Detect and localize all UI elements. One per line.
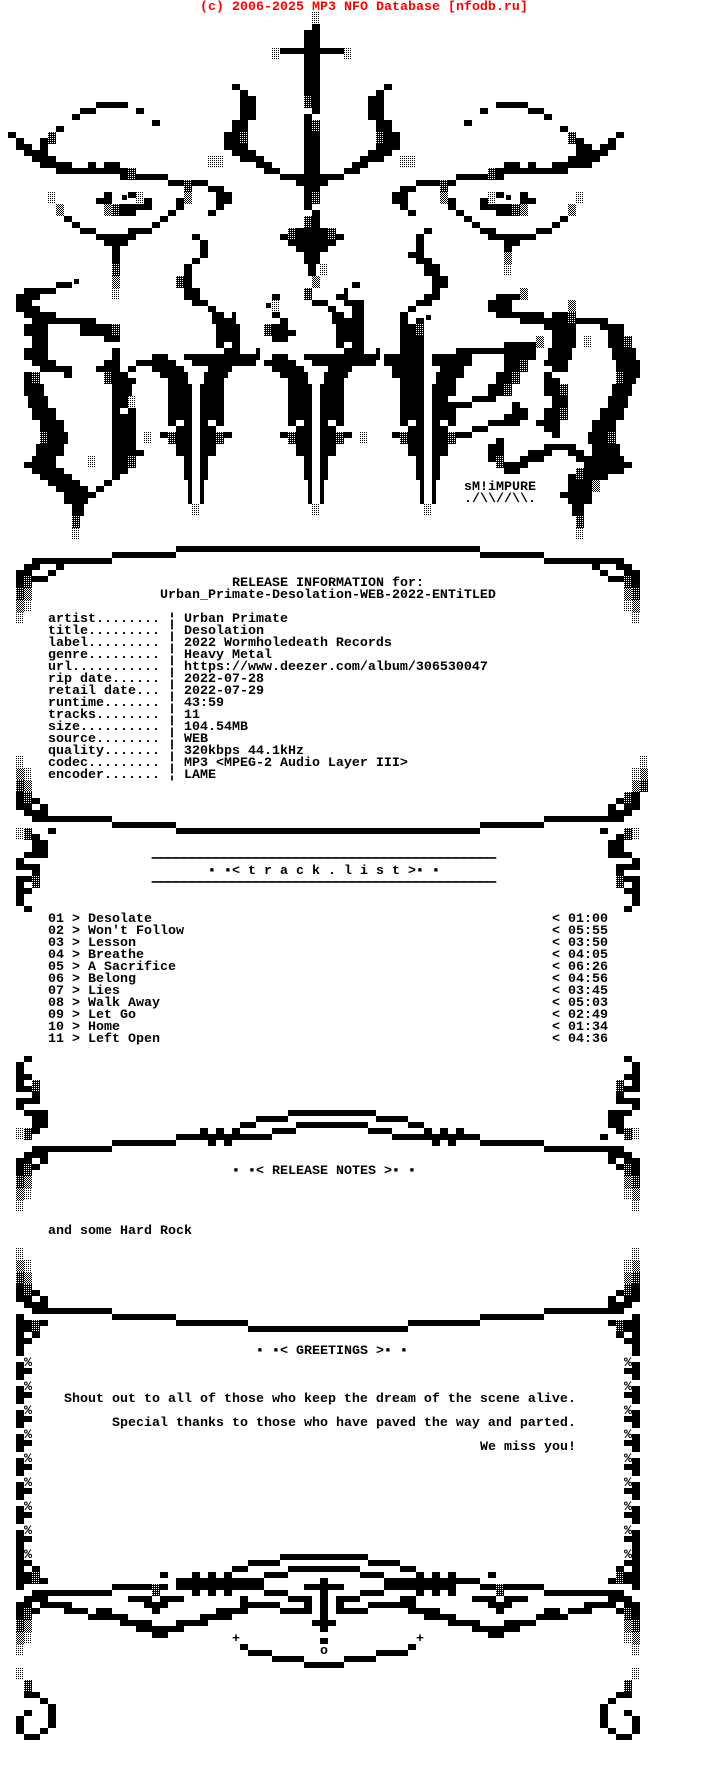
text block: tracks and durations [48,912,608,1047]
text block: tracks and durations: 10 > Home [48,1020,120,1035]
text block: release details: retail date... ¦ 2022-07-29 [48,684,264,699]
text block: tracks and durations: 03 > Lesson [48,936,136,951]
frame: left and right side rails: % [24,1356,32,1371]
text block: tracks and durations: 08 > Walk Away [48,996,160,1011]
band logotype letters [16,279,640,540]
frame: left and right side rails: % [624,1428,632,1443]
text block: greetings message: Shout out to all of those who keep the dream of the scene alive. [64,1392,576,1407]
frame: info bottom border [16,756,648,831]
text block: tracks and durations: < 04:56 [552,972,608,987]
text block: tracks and durations: 02 > Won't Follow [48,924,184,939]
text block: tracks and durations: 07 > Lies [48,984,120,999]
text block: release details: size.......... ¦ 104.54MB [48,720,248,735]
heading: track list: ▪ ▪< t r a c k . l i s t >▪ ▪ [208,864,440,879]
text block: tracks and durations: 01 > Desolate [48,912,152,927]
text block: tracks and durations: 05 > A Sacrifice [48,960,176,975]
frame: release notes arch [16,1059,640,1212]
frame: notes bottom border [16,1248,640,1329]
text block: greetings message [64,1392,576,1455]
logo: ENTiTLED ascii art [8,12,640,540]
frame: left and right side rails: % [624,1452,632,1467]
frame: left and right side rails: % [24,1404,32,1419]
frame: left and right side rails: % [624,1356,632,1371]
text block: tracks and durations: < 04:05 [552,948,608,963]
frame: left and right side rails: % [624,1380,632,1395]
text block: tracks and durations: 04 > Breathe [48,948,144,963]
text block: release details: tracks........ ¦ 11 [48,708,200,723]
frame: left and right side rails [16,1317,640,1563]
panel: release information [16,549,648,831]
frame: left and right side rails: % [24,1452,32,1467]
heading: track list: ─────────────────────────────────────────── [151,876,497,891]
heading: release notes: ▪ ▪< RELEASE NOTES >▪ ▪ [232,1164,416,1179]
frame: left and right side rails: % [624,1476,632,1491]
frame: left and right side rails: % [624,1524,632,1539]
artist credit tag: sM!iMPURE [464,480,536,495]
panel: greetings [16,1317,640,1563]
text block: release details: codec......... ¦ MP3 <MPEG-2 Audio Layer III> [48,756,408,771]
text block: release details: quality....... ¦ 320kbps 44.1kHz [48,744,304,759]
text block: release details [48,612,488,783]
text block: tracks and durations: < 03:45 [552,984,608,999]
text block: tracks and durations: < 04:36 [552,1032,608,1047]
text block: tracks and durations: < 06:26 [552,960,608,975]
text block: release details: genre......... ¦ Heavy Metal [48,648,272,663]
ornament: cross and wings [8,12,624,288]
frame: left and right side rails: % [24,1428,32,1443]
frame: left and right side rails: % [24,1524,32,1539]
frame: left and right side rails: % [24,1476,32,1491]
frame: left and right side rails: % [24,1380,32,1395]
frame: track list side ornaments top [16,828,640,909]
text block: tracks and durations: 11 > Left Open [48,1032,160,1047]
frame: left and right side rails: % [24,1500,32,1515]
heading: release information: Urban_Primate-Desolation-WEB-2022-ENTiTLED [160,588,496,603]
text block: tracks and durations: < 03:50 [552,936,608,951]
footer ornament: cross and wings: + [232,1632,240,1647]
text block: greetings message: We miss you! [480,1440,576,1455]
artist credit tag: ./\\//\\. [464,492,536,507]
heading: track list: ─────────────────────────────────────────── [151,852,497,867]
text block: tracks and durations: < 02:49 [552,1008,608,1023]
text block: tracks and durations: < 05:55 [552,924,608,939]
text block: tracks and durations: < 05:03 [552,996,608,1011]
text block: tracks and durations: 09 > Let Go [48,1008,136,1023]
text block: greetings message: Special thanks to those who have paved the way and parted. [112,1416,576,1431]
artist credit tag [464,480,536,507]
heading: track list [151,852,497,891]
text block: tracks and durations: < 01:00 [552,912,608,927]
frame: left and right side rails: % [624,1548,632,1563]
title: copyright banner: (c) 2006-2025 MP3 NFO Database [nfodb.ru] [200,0,528,15]
frame: left and right side rails: % [624,1404,632,1419]
text block: release details: artist........ ¦ Urban Primate [48,612,288,627]
text block: release details: title......... ¦ Desolation [48,624,264,639]
text block: release details: label......... ¦ 2022 Wormholedeath Records [48,636,392,651]
footer ornament: cross and wings [16,1557,640,1665]
text block: release details: url........... ¦ https://www.deezer.com/album/306530047 [48,660,488,675]
panel: release notes [16,1059,640,1329]
heading: release information [160,576,496,603]
text block: tracks and durations: < 01:34 [552,1020,608,1035]
text block: tracks and durations: 06 > Belong [48,972,136,987]
frame: left and right side rails: % [24,1548,32,1563]
frame: info top border [16,549,640,624]
panel: track list [16,828,640,1047]
footer ornament: cross and wings: + [416,1632,424,1647]
footer corner hooks [16,1668,640,1737]
text block: release details: encoder....... ¦ LAME [48,768,216,783]
heading: greetings: ▪ ▪< GREETINGS >▪ ▪ [256,1344,408,1359]
text block: notes: and some Hard Rock [48,1224,192,1239]
text block: release details: rip date...... ¦ 2022-07-28 [48,672,264,687]
footer ornament: cross and wings: o [320,1644,328,1659]
frame: left and right side rails: % [624,1500,632,1515]
text block: release details: source........ ¦ WEB [48,732,208,747]
heading: release information: RELEASE INFORMATION for: [232,576,424,591]
text block: release details: runtime....... ¦ 43:59 [48,696,224,711]
